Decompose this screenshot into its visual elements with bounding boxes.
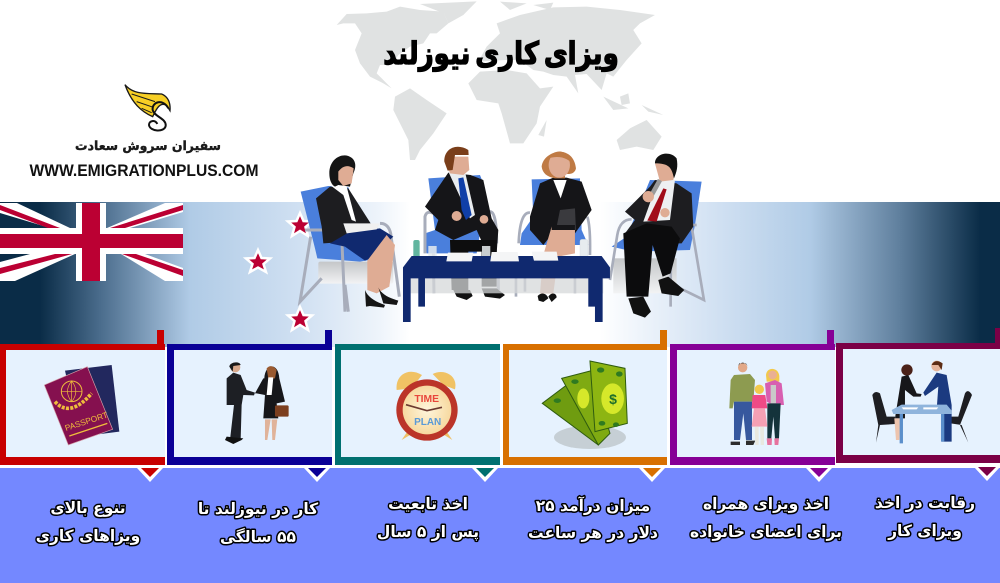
flag: Union Jack [0,203,183,281]
world map [337,1,663,160]
icon: passports: PASSPORT [64,410,109,433]
caption: رقابت در اخذ [875,494,975,512]
icon: passports [44,365,119,445]
caption [377,495,479,542]
icon: banknotes [542,361,627,449]
table with water bottles and name cards [403,239,610,322]
caption [690,495,842,541]
icon: family [729,363,784,445]
caption: ویزای کار [887,522,962,540]
caption band [0,468,1000,583]
website: WWW.EMIGRATIONPLUS.COM [30,161,258,180]
caption: تنوع بالای [50,499,126,517]
icon: winged swan [125,85,170,131]
caption [198,500,319,546]
icon: business meeting at table [872,361,972,443]
icon: businesspeople shaking hands [225,362,289,444]
icon: alarm clock: TIME [414,394,439,405]
logo [30,85,258,180]
icon: alarm clock: PLAN [414,417,441,428]
icon: banknotes: $ [609,391,617,407]
panel: family visa (purple) [670,330,842,541]
caption: میزان درآمد ۲۵ [536,496,650,515]
person: man in blue tie [425,147,505,300]
icon: alarm clock [396,372,458,441]
person: man speaking into microphone [610,154,704,318]
pointer [304,468,330,482]
background gradient band [0,202,1000,347]
pointer [974,467,1000,481]
caption: برای اعضای خانواده [690,523,842,541]
logo Persian name: سفیران سروش سعادت [75,138,221,153]
caption [36,499,140,545]
panel: work until age 55 (navy) [167,330,332,546]
person: woman taking notes [300,155,399,312]
caption: دلار در هر ساعت [528,524,658,542]
caption [875,494,975,540]
caption: اخذ ویزای همراه [703,495,829,513]
caption [528,496,658,542]
caption: ویزاهای کاری [36,527,140,545]
illustration: panel discussion [300,147,704,322]
pointer [472,468,498,482]
caption: پس از ۵ سال [377,523,479,542]
title: ویزای کاری نیوزلند [383,35,619,72]
person: woman with auburn hair [516,152,592,302]
pointer [639,468,665,482]
stars [246,213,312,330]
panel: competition for work visa (maroon) [836,328,1000,540]
caption: اخذ تابعیت [388,495,468,513]
panel: citizenship after 5 years (teal) [335,344,500,542]
caption: کار در نیوزلند تا [198,500,319,518]
caption: ۵۵ سالگی [220,527,296,546]
panel: hourly income (orange) [503,330,667,542]
pointer [137,468,163,482]
pointer [806,468,832,482]
panel: varied visa types (red) [0,330,165,545]
